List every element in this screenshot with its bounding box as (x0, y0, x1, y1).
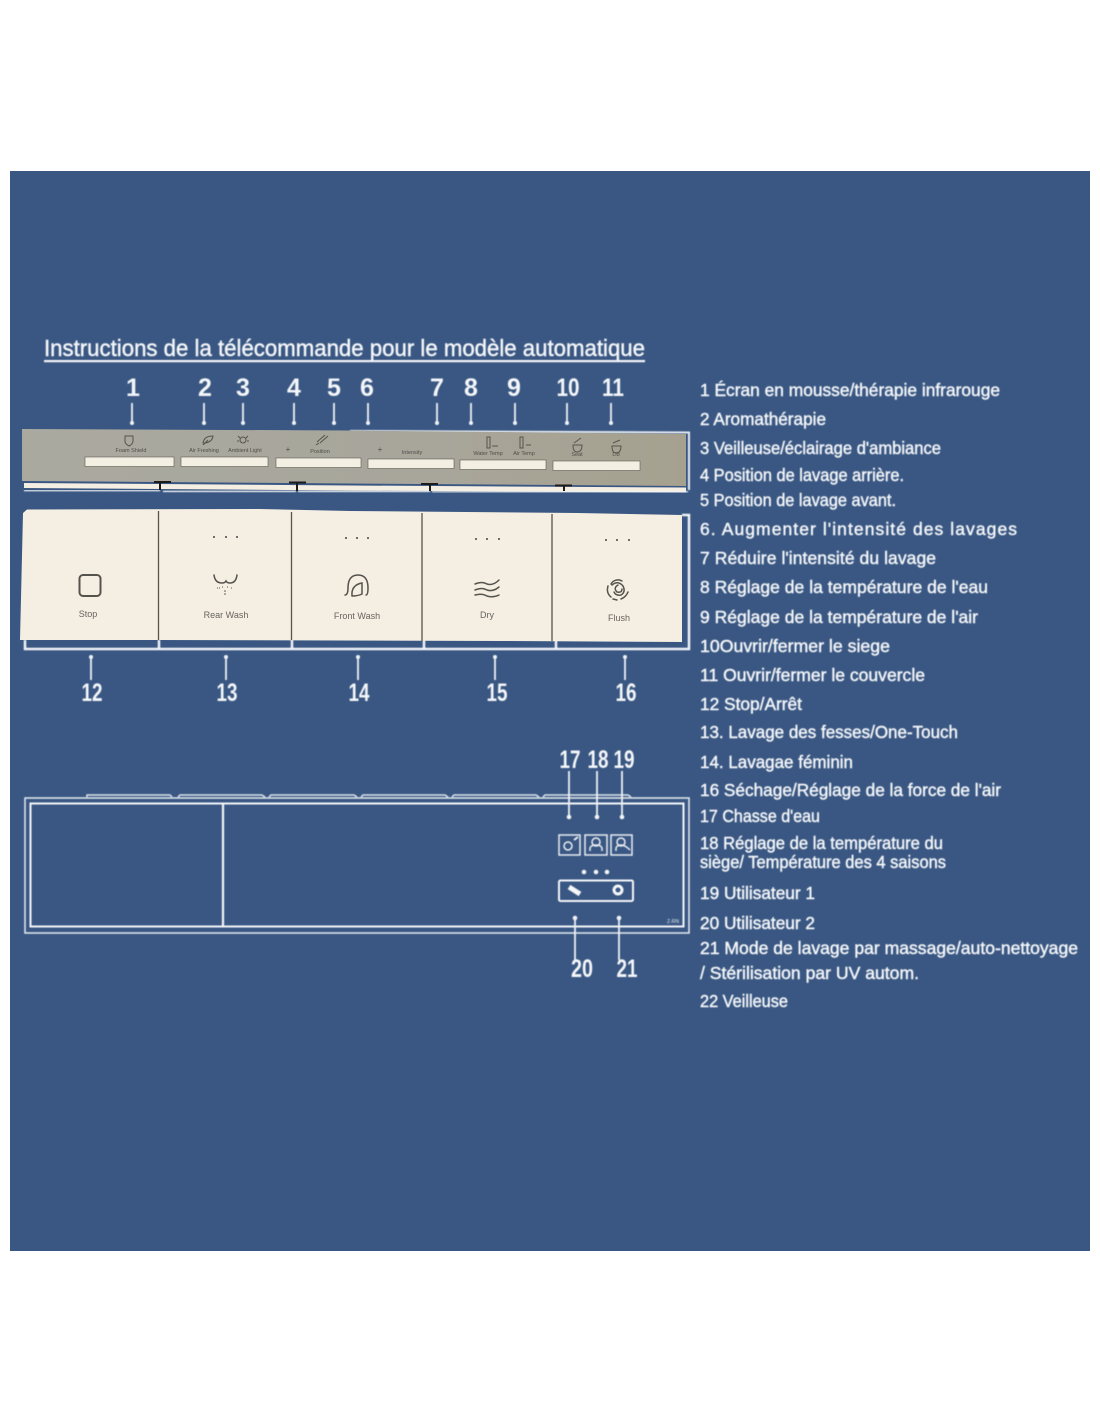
small model mark: Z-RN (667, 919, 679, 925)
legend list: 8 Réglage de la température de l'eau (700, 577, 988, 597)
lower callout numbers and arrows 12-16: 13 (216, 679, 238, 707)
callout numbers and arrows 17-21: 21 (616, 955, 638, 983)
legend list: 18 Réglage de la température du (700, 833, 943, 853)
top remote strip with buttons: Air Freshing (189, 448, 219, 454)
legend list: 4 Position de lavage arrière. (700, 465, 904, 485)
top callout numbers and arrows 1-11: 3 (236, 374, 250, 402)
button: dry: Dry (480, 610, 494, 620)
top callout numbers and arrows 1-11 (126, 374, 624, 425)
legend list: 17 Chasse d'eau (700, 806, 820, 826)
legend list: 10Ouvrir/fermer le siege (700, 636, 890, 656)
button: stop (79, 575, 100, 619)
legend list: 11 Ouvrir/fermer le couvercle (700, 665, 925, 685)
strip icons (125, 436, 133, 446)
button: flush (605, 539, 630, 623)
rear buttons 20 21 (559, 880, 633, 901)
legend list: 19 Utilisateur 1 (700, 883, 815, 903)
top callout numbers and arrows 1-11: 9 (507, 374, 521, 402)
legend list: 21 Mode de lavage par massage/auto-nettoyage (700, 938, 1078, 958)
top remote strip with buttons: Position (310, 449, 330, 455)
button: dry (475, 538, 500, 620)
legend list: 14. Lavagae féminin (700, 752, 853, 772)
legend list: 12 Stop/Arrêt (700, 694, 802, 714)
top remote strip with buttons: Ambient Light (228, 448, 262, 454)
legend list: 20 Utilisateur 2 (700, 913, 815, 933)
legend list: 9 Réglage de la température de l'air (700, 607, 978, 627)
button: stop: Stop (79, 609, 97, 619)
lower callout numbers and arrows 12-16: 12 (82, 679, 102, 707)
top remote strip with buttons: Water Temp (473, 451, 503, 457)
blue background panel (10, 171, 1090, 1251)
top callout numbers and arrows 1-11: 6 (360, 374, 374, 402)
strip button labels: Foam Shield (116, 448, 146, 454)
indicator dots (582, 870, 609, 874)
button: flush: Flush (608, 613, 630, 623)
top callout numbers and arrows 1-11: 2 (198, 374, 212, 402)
legend list: 2 Aromathérapie (700, 409, 826, 429)
legend list: 13. Lavage des fesses/One-Touch (700, 722, 958, 742)
top callout numbers and arrows 1-11: 5 (327, 374, 341, 402)
rear buttons 17 18 19 (559, 835, 632, 855)
top remote strip with buttons: Seat (571, 452, 583, 458)
top remote strip with buttons: Lid (612, 452, 620, 458)
strip buttons (85, 457, 640, 470)
top callout numbers and arrows 1-11: 7 (430, 374, 444, 402)
top callout numbers and arrows 1-11: 10 (556, 374, 580, 402)
legend list: 6. Augmenter l'intensité des lavages (700, 519, 1017, 539)
button: front wash: Front Wash (334, 611, 380, 621)
top callout numbers and arrows 1-11: 1 (126, 374, 140, 402)
strip black connectors (154, 482, 572, 491)
legend list: siège/ Température des 4 saisons (700, 852, 946, 872)
legend list: 22 Veilleuse (700, 991, 788, 1011)
legend list: / Stérilisation par UV autom. (700, 963, 919, 983)
top callout numbers and arrows 1-11: 4 (287, 374, 301, 402)
callout numbers and arrows 17-21: 17 (560, 746, 580, 774)
callout numbers and arrows 17-21: 20 (571, 955, 593, 983)
top remote strip with buttons: Air Temp (513, 451, 535, 457)
lower callout numbers and arrows 12-16: 14 (348, 679, 370, 707)
legend list: 5 Position de lavage avant. (700, 490, 896, 510)
top remote strip with buttons: + (378, 445, 383, 454)
callout numbers and arrows 17-21 (560, 746, 638, 983)
lower callout numbers and arrows 12-16: 15 (486, 679, 508, 707)
wash buttons panel (20, 509, 682, 642)
legend list: 1 Écran en mousse/thérapie infrarouge (700, 380, 1000, 400)
button: rear wash: Rear Wash (204, 610, 248, 620)
lower callout numbers and arrows 12-16: 16 (616, 679, 636, 707)
top remote strip with buttons: Intensity (402, 450, 422, 456)
top remote strip with buttons: + (286, 445, 291, 454)
button: front wash (334, 537, 380, 621)
button: rear wash (204, 536, 248, 620)
lower callout numbers and arrows 12-16 (82, 655, 636, 707)
white bracket under wash buttons (25, 515, 689, 649)
rear remote outline diagram (25, 795, 689, 933)
top callout numbers and arrows 1-11: 11 (602, 374, 624, 402)
top remote strip with buttons (22, 429, 689, 492)
legend list (700, 380, 1078, 1011)
legend list: 7 Réduire l'intensité du lavage (700, 548, 936, 568)
title: Instructions de la télécommande pour le modèle automatique (44, 335, 645, 361)
top callout numbers and arrows 1-11: 8 (464, 374, 478, 402)
callout numbers and arrows 17-21: 18 (588, 746, 609, 774)
legend list: 3 Veilleuse/éclairage d'ambiance (700, 438, 941, 458)
callout numbers and arrows 17-21: 19 (614, 746, 634, 774)
legend list: 16 Séchage/Réglage de la force de l'air (700, 780, 1001, 800)
